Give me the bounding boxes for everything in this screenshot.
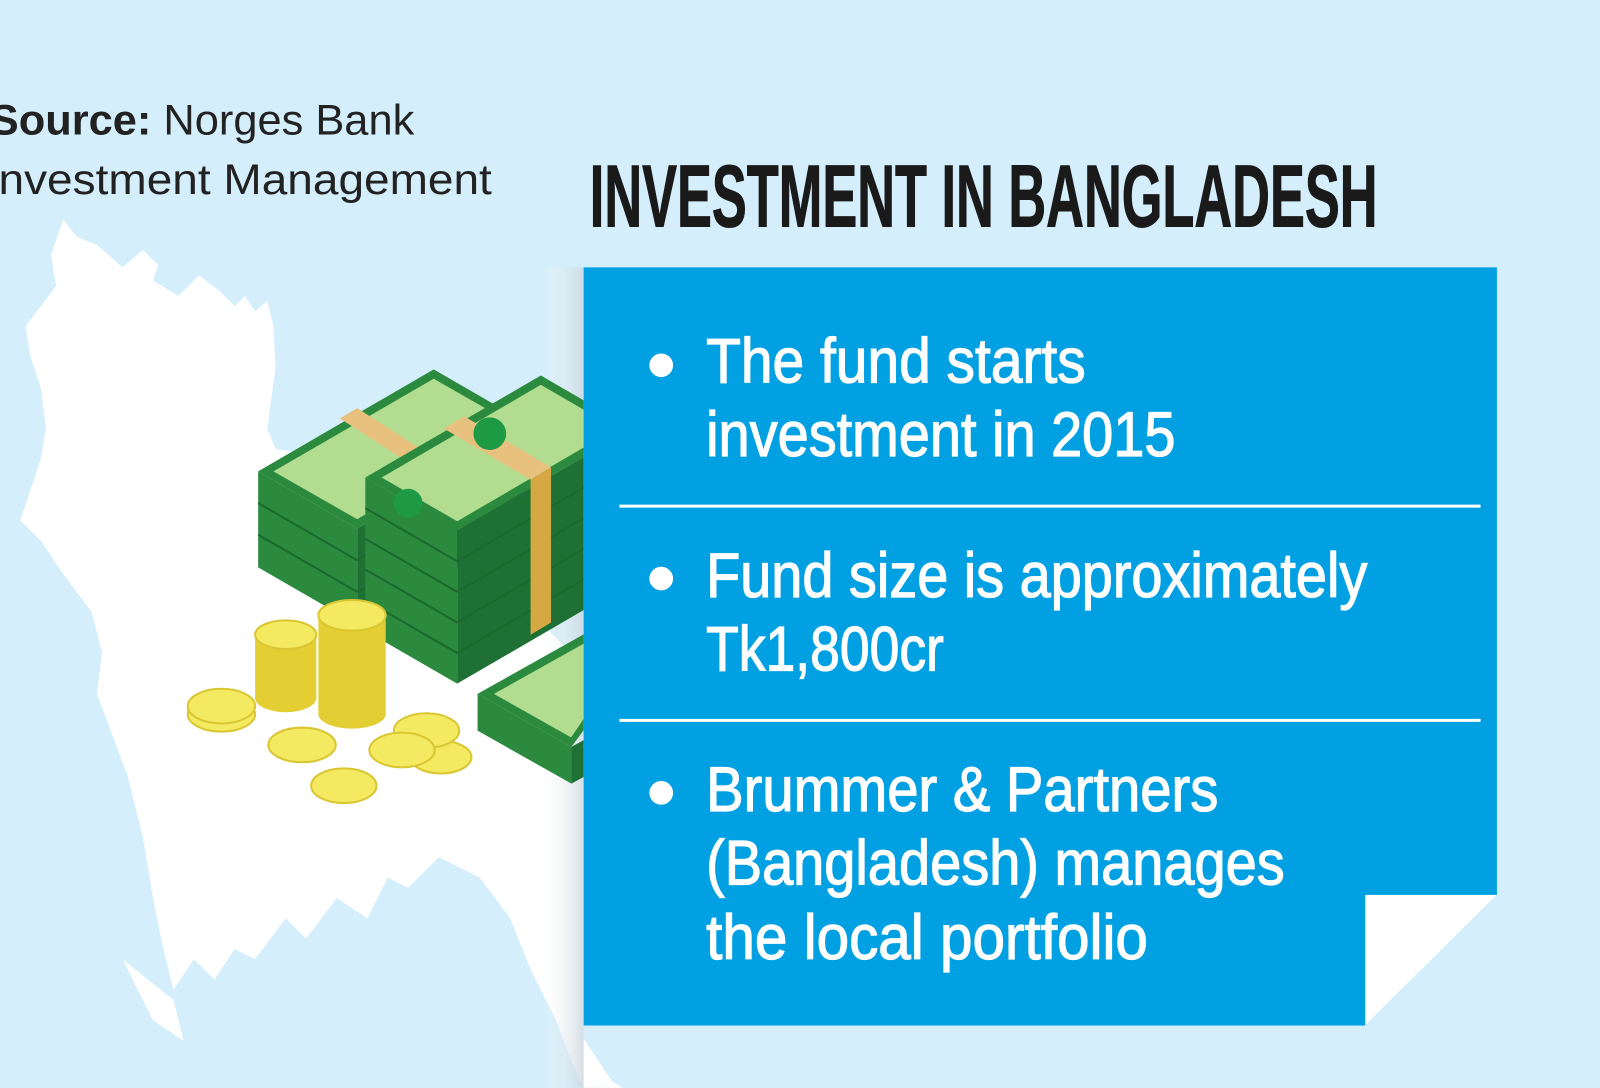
bullet 1 [650,327,1176,470]
bullet 3: (Bangladesh) manages [706,829,1285,899]
bullet 3: Brummer & Partners [706,755,1218,825]
coins [188,600,471,803]
stack B [364,376,584,684]
bullet 2 [650,541,1368,684]
bullet 1: The fund starts [706,327,1086,397]
stack C [478,634,584,784]
source note: Source: Norges Bank [0,97,415,145]
panel: investment facts [584,267,1497,1026]
map: Bangladesh outline [20,219,622,1088]
bullet 3: the local portfolio [706,903,1148,973]
bullet 1: investment in 2015 [706,400,1176,470]
stack A [258,369,533,624]
bullet 2: Fund size is approximately [706,541,1368,611]
icon: money stacks and coins [186,369,584,804]
bullet 2: Tk1,800cr [706,614,944,684]
source note [0,97,492,204]
panel shadow [541,267,584,1088]
folded corner [1365,895,1497,1026]
bullet 3 [650,755,1285,973]
